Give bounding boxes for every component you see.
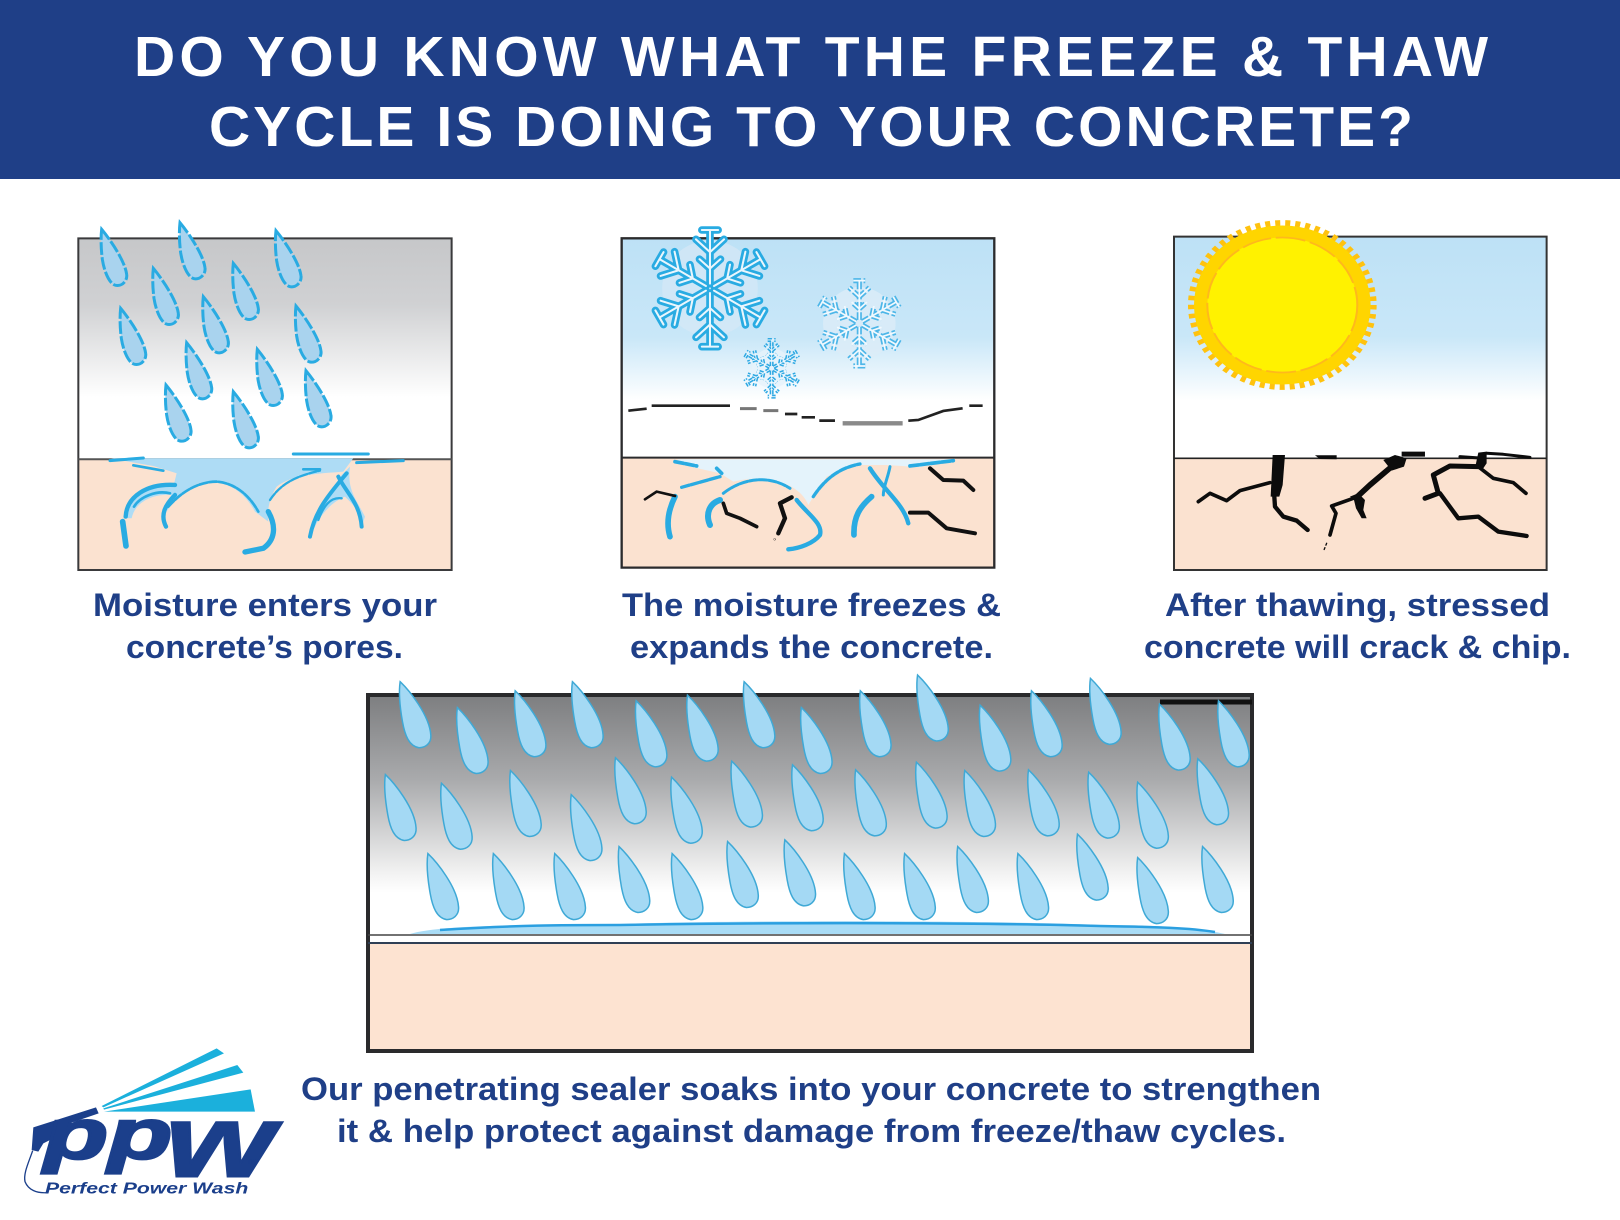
title banner: DO YOU KNOW WHAT THE FREEZE & THAW — [134, 25, 1488, 89]
caption: sealer — [301, 1071, 1321, 1149]
frozen water branches — [668, 459, 953, 549]
panel: after thawing — [1174, 223, 1547, 570]
rain drops — [385, 675, 1249, 924]
snow line — [628, 406, 983, 423]
snowflake medium — [817, 281, 901, 366]
caption: after thawing: concrete will crack & chip. — [1144, 629, 1571, 665]
spray rays — [102, 1048, 255, 1112]
title banner: CYCLE IS DOING TO YOUR CONCRETE? — [209, 95, 1413, 159]
water pool and branches — [110, 454, 403, 552]
caption: after thawing: After thawing, stressed — [1165, 587, 1550, 623]
icon: sun — [1192, 223, 1373, 387]
sealer film — [410, 921, 1225, 934]
panel: moisture enters — [78, 223, 452, 570]
caption: sealer: it & help protect against damage from freeze/thaw cycles. — [337, 1113, 1286, 1149]
spray gun — [25, 1107, 99, 1193]
cracks — [1271, 452, 1487, 518]
panel: moisture freezes — [622, 230, 994, 568]
sealer surface line — [440, 923, 1215, 932]
caption: moisture freezes: The moisture freezes & — [622, 587, 1001, 623]
cracks — [645, 468, 975, 540]
caption: moisture freezes: expands the concrete. — [630, 629, 993, 665]
caption: moisture freezes — [622, 587, 1001, 665]
caption: moisture enters: concrete’s pores. — [126, 629, 403, 665]
logo: Perfect Power Wash — [25, 1048, 283, 1199]
panel: sealed concrete — [368, 675, 1252, 1051]
caption: moisture enters: Moisture enters your — [93, 587, 437, 623]
rain drops — [101, 223, 331, 448]
logo letter w: w — [165, 1083, 283, 1199]
caption: sealer: Our penetrating sealer soaks into your concrete to strengthen — [301, 1071, 1321, 1107]
logo letters pp: pp — [41, 1094, 172, 1174]
logo tagline: Perfect Power Wash — [45, 1180, 248, 1197]
snowflake large — [652, 230, 768, 347]
trademark: TM — [247, 1157, 257, 1166]
caption: after thawing — [1144, 587, 1571, 665]
caption: moisture enters — [93, 587, 437, 665]
title banner — [0, 0, 1620, 179]
snowflake small — [744, 340, 800, 397]
